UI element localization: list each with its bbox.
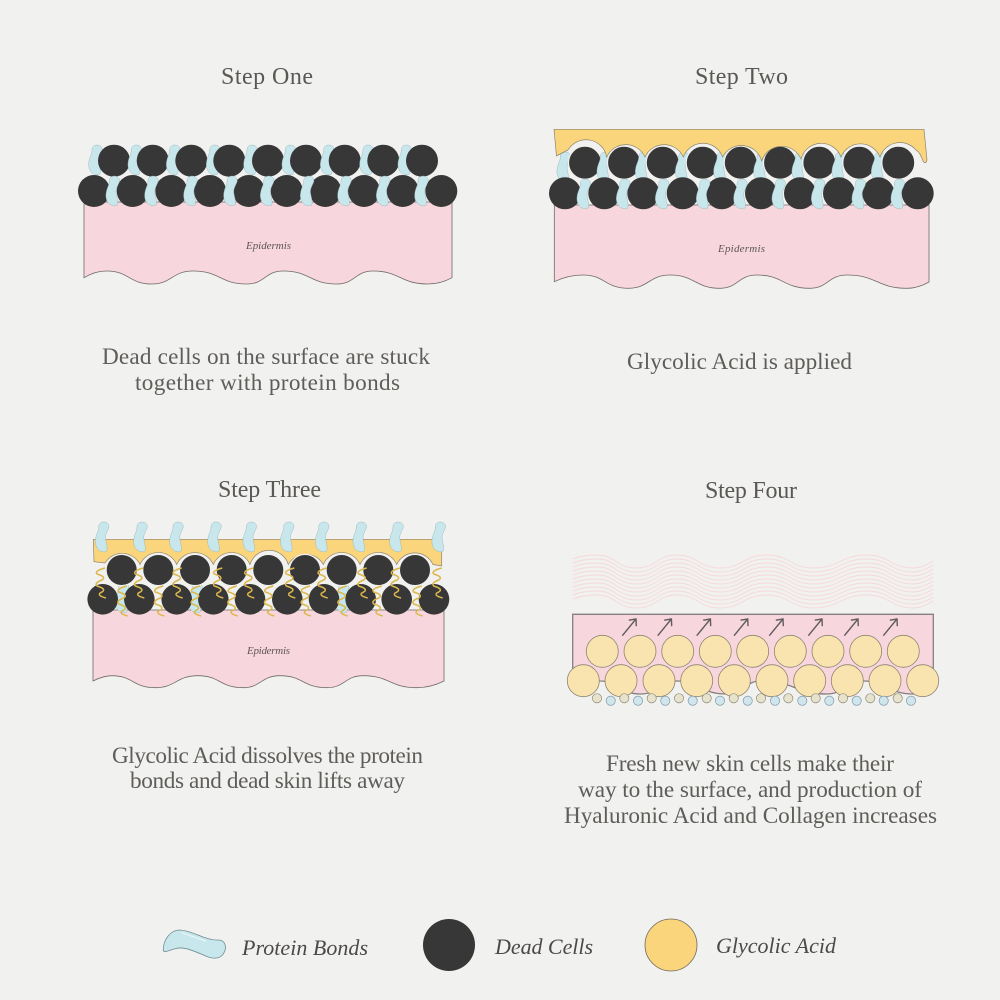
glycolic acid layer <box>554 129 927 163</box>
caption: step three: Glycolic Acid dissolves the protein <box>112 743 423 769</box>
lower dead cells <box>549 177 934 209</box>
lifted protein bonds <box>95 522 446 552</box>
legend icon: glycolic acid <box>645 919 697 971</box>
epidermis layer <box>84 202 452 284</box>
lower dead cells <box>87 584 449 615</box>
caption: step one <box>102 344 430 396</box>
upper fresh cells <box>586 635 919 667</box>
lower fresh cells <box>567 665 939 697</box>
heading: step two: Step Two <box>695 64 788 90</box>
epidermis layer <box>573 614 933 694</box>
legend icon: dead cells <box>423 919 475 971</box>
small blue molecules <box>606 696 916 705</box>
lower dead cells <box>78 175 457 207</box>
panel: step four <box>564 478 939 829</box>
caption: step four: Fresh new skin cells make their <box>606 751 894 777</box>
panel: step three <box>87 477 449 794</box>
upper dead cells <box>106 554 431 586</box>
caption: step two: Glycolic Acid is applied <box>627 349 852 375</box>
lower protein bonds <box>577 179 905 209</box>
legend text: protein bonds: Protein Bonds <box>241 935 368 960</box>
collagen waves <box>573 555 933 608</box>
panel: step two <box>549 64 934 375</box>
panel: step one <box>78 64 457 396</box>
glycolic acid layer <box>93 539 442 566</box>
caption: step four <box>564 751 937 829</box>
remaining protein bonds <box>115 583 349 613</box>
small beige molecules <box>592 694 902 703</box>
heading: step three: Step Three <box>218 477 321 503</box>
epidermis layer <box>554 205 929 288</box>
caption: step three: bonds and dead skin lifts away <box>130 768 405 794</box>
dissolving bonds: upper squiggles <box>96 568 443 598</box>
legend text: glycolic acid: Glycolic Acid <box>716 933 837 958</box>
legend text: dead cells: Dead Cells <box>494 934 593 959</box>
caption: step one: together with protein bonds <box>135 370 400 396</box>
caption: step one: Dead cells on the surface are stuck <box>102 344 430 370</box>
caption: step three <box>112 743 423 794</box>
lower protein bonds <box>106 176 428 206</box>
legend icon: protein bonds <box>163 930 225 958</box>
upper row: protein bonds and dead cells <box>557 146 915 182</box>
upward arrows <box>622 619 897 636</box>
caption: step four: Hyaluronic Acid and Collagen increases <box>564 803 937 829</box>
upper row: protein bonds and dead cells <box>89 145 438 177</box>
legend <box>163 919 837 971</box>
epidermis label: Epidermis <box>246 645 290 657</box>
epidermis label: Epidermis <box>245 240 291 252</box>
dissolving bonds: lower squiggles <box>118 586 423 616</box>
heading: step four: Step Four <box>705 478 797 504</box>
epidermis layer <box>93 610 444 688</box>
epidermis label: Epidermis <box>717 243 765 255</box>
heading: step one: Step One <box>221 64 313 90</box>
caption: step four: way to the surface, and production of <box>578 777 922 803</box>
